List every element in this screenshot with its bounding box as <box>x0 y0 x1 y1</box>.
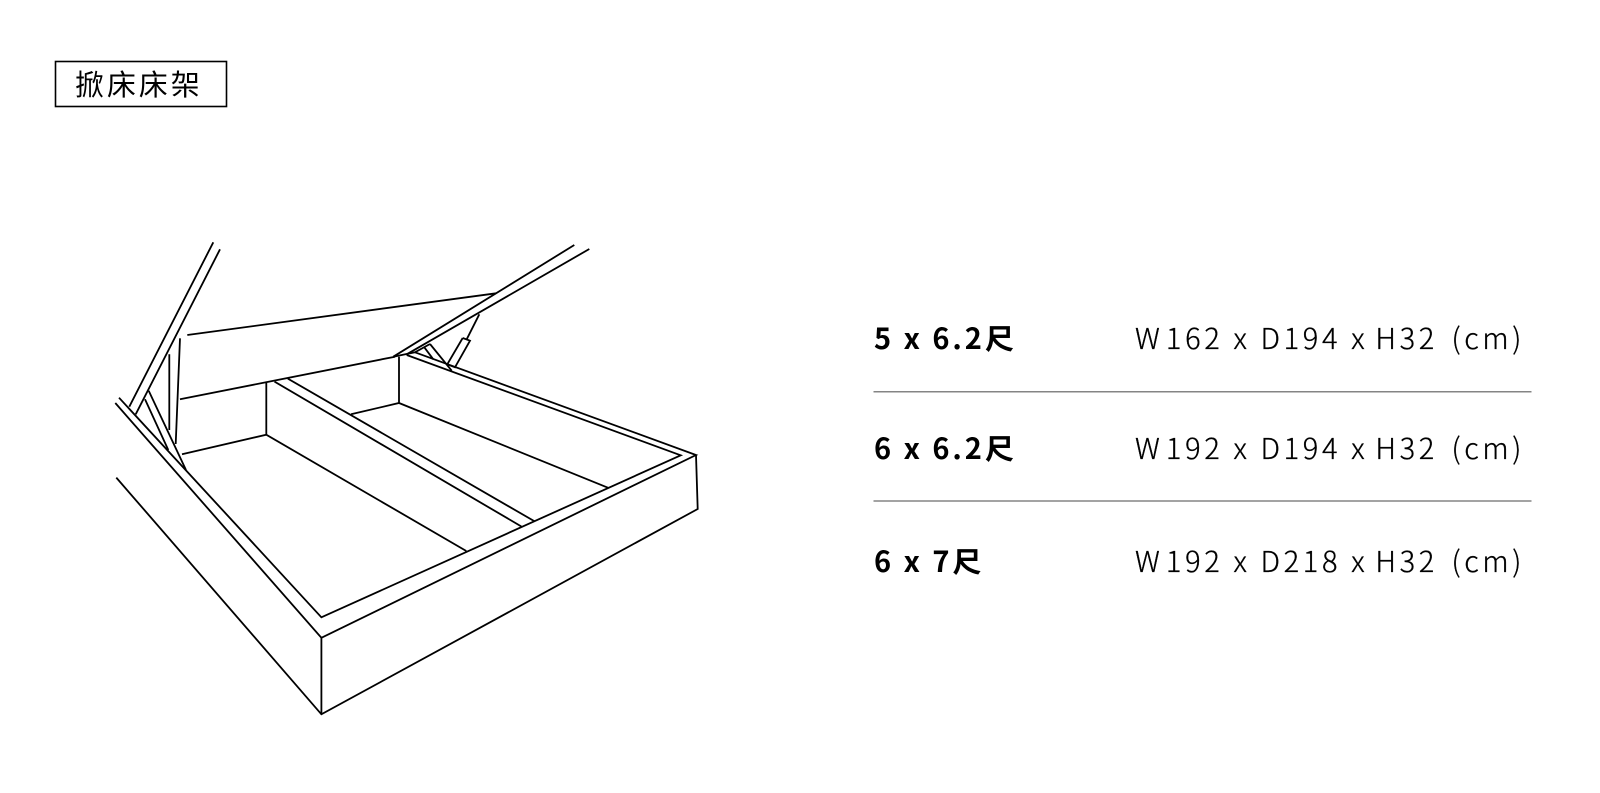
illustration: lift-up storage bed frame <box>115 242 698 714</box>
size table <box>874 316 1532 581</box>
raised lid surface <box>180 293 496 399</box>
row: 6 x 6.2 <box>874 426 1525 468</box>
row: 6 x 6.2: 6 x 6.2尺 <box>874 426 1017 468</box>
title label <box>56 62 226 106</box>
row: 5 x 6.2: 5 x 6.2尺 <box>874 316 1017 358</box>
row: 6 x 6.2: W192 x D194 x H32 (cm) <box>1135 426 1525 468</box>
right lid panel edge <box>393 245 589 357</box>
row: 6 x 7: W192 x D218 x H32 (cm) <box>1135 539 1525 581</box>
centre divider rail <box>274 379 535 526</box>
left gas strut and supports <box>145 338 186 470</box>
row: 5 x 6.2: W162 x D194 x H32 (cm) <box>1135 316 1525 358</box>
left lid panel edge <box>129 242 220 414</box>
title label: 掀床床架 <box>75 62 203 104</box>
right gas strut and hinge <box>393 314 479 371</box>
storage compartment interior <box>182 357 608 551</box>
row: 6 x 7 <box>874 539 1525 581</box>
row: 5 x 6.2 <box>874 316 1525 358</box>
frame top rim <box>115 352 696 638</box>
row: 6 x 7: 6 x 7尺 <box>874 539 984 581</box>
frame outer side walls <box>116 455 698 714</box>
